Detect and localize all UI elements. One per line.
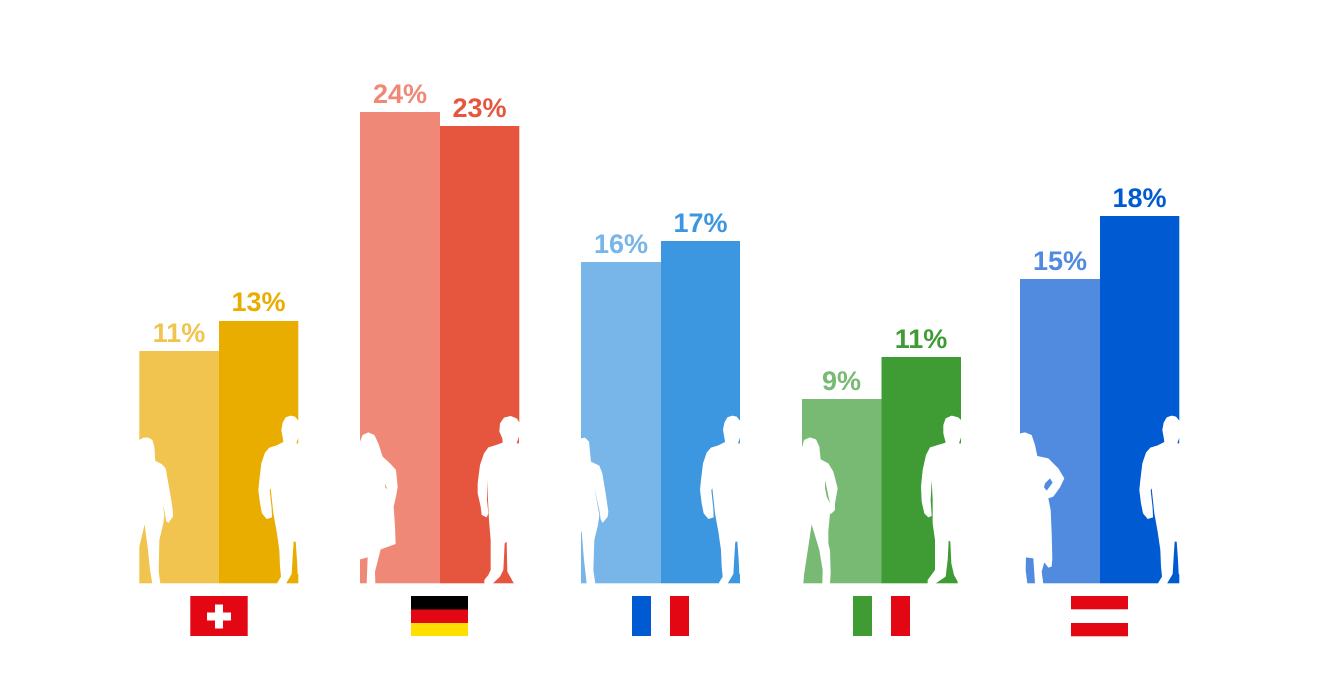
group: France — [578, 208, 743, 636]
icon: woman silhouette — [357, 432, 398, 584]
icon: man silhouette — [258, 416, 302, 584]
icon: man silhouette — [921, 416, 964, 584]
icon: man silhouette — [700, 416, 743, 584]
label: 13%: 13% — [231, 287, 286, 317]
group: Italy — [800, 324, 964, 636]
bar: Switzerland men 13% — [219, 321, 298, 583]
bar: Italy women 9% — [802, 399, 882, 583]
icon: woman silhouette — [800, 437, 838, 584]
bar: France men 17% — [661, 241, 740, 583]
label: 11%: 11% — [895, 324, 947, 354]
label: 17%: 17% — [673, 208, 728, 238]
label: 16%: 16% — [594, 229, 648, 259]
bar: Italy men 11% — [882, 357, 961, 583]
icon: man silhouette — [1139, 416, 1183, 584]
bar: Germany women 24% — [360, 112, 440, 583]
group: Austria — [1017, 183, 1183, 636]
icon: woman silhouette — [578, 438, 608, 584]
bar: Germany men 23% — [440, 126, 519, 583]
group: Germany — [357, 79, 523, 636]
icon: woman silhouette — [137, 438, 173, 584]
label: 24%: 24% — [373, 79, 427, 109]
label: 9%: 9% — [822, 366, 861, 396]
icon: French flag — [632, 596, 689, 636]
icon: Italian flag — [853, 596, 910, 636]
icon: woman silhouette — [1017, 432, 1064, 584]
group: Switzerland — [137, 287, 302, 636]
label: 11%: 11% — [153, 318, 205, 348]
icon: Austrian flag — [1071, 596, 1128, 636]
label: 18%: 18% — [1112, 183, 1167, 213]
bar: Austria men 18% — [1100, 216, 1179, 583]
bar: Austria women 15% — [1020, 279, 1100, 583]
bar: Switzerland women 11% — [139, 351, 219, 583]
icon: Swiss flag — [190, 596, 248, 636]
label: 23%: 23% — [452, 93, 507, 123]
icon: man silhouette — [478, 416, 523, 584]
bar: France women 16% — [581, 262, 661, 583]
label: 15%: 15% — [1033, 246, 1087, 276]
icon: German flag — [411, 596, 468, 636]
